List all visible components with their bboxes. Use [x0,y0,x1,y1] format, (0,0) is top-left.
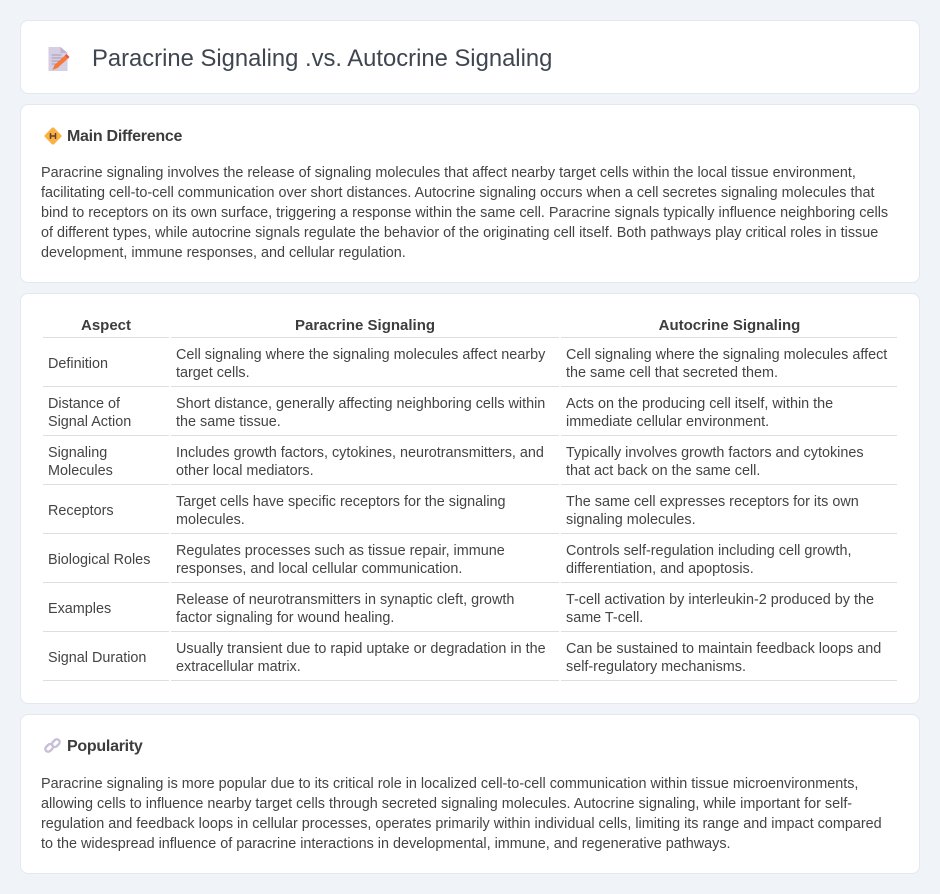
table row: examples: T-cell activation by interleukin-2 produced by the [566,592,874,608]
text block: main difference paragraph: facilitating cell-to-cell communication over short distances. Autocrine signaling occurs when a cell secretes signaling molecules that [41,185,874,201]
table row: distance of signal action: Acts on the producing cell itself, within the [566,396,833,412]
table row: definition: target cells. [176,365,250,381]
table row: receptors: Receptors [48,503,114,519]
table row: signaling molecules: other local mediators. [176,463,314,479]
table row: signaling molecules: Typically involves growth factors and cytokines [566,445,864,461]
table row: examples: Examples [48,601,111,617]
table row: biological roles: Regulates processes such as tissue repair, immune [176,543,505,559]
text block: popularity paragraph: Paracrine signaling is more popular due to its critical role in localized cell-to-cell communication within tissue microenvironments, [41,776,858,792]
table row: signaling molecules: Signaling [48,445,107,461]
text block: main difference paragraph: development, immune responses, and cellular regulation. [41,245,406,261]
icon: document with pencil [48,47,70,71]
table row: definition: Definition [48,356,108,372]
text block: popularity paragraph: regulation and feedback loops in cellular processes, operates primarily within individual cells, limiting its range and impact compared [41,816,882,832]
text block: main difference paragraph: bind to receptors on its own surface, triggering a response within the same cell. Paracrine signals typically influence neighboring cells [41,205,888,221]
table row: biological roles [48,543,852,577]
table row: signaling molecules: Molecules [48,463,113,479]
panel: main difference [20,104,920,283]
table row: signal duration: Usually transient due to rapid uptake or degradation in the [176,641,546,657]
table row: definition: Cell signaling where the signaling molecules affect nearby [176,347,545,363]
table row: distance of signal action: Distance of [48,396,120,412]
table row: signal duration: Signal Duration [48,650,146,666]
table row: distance of signal action: immediate cellular environment. [566,414,769,430]
table row: distance of signal action: Signal Action [48,414,131,430]
table header: Aspect [81,317,131,334]
table row: distance of signal action: the same tissue. [176,414,281,430]
heading: main difference: Main Difference [67,128,182,145]
table row: distance of signal action [48,396,833,430]
table row: signaling molecules: that act back on the same cell. [566,463,760,479]
table row: examples: same T-cell. [566,610,643,626]
table row: signaling molecules [48,445,864,479]
table row: receptors [48,494,859,528]
table row: biological roles: Controls self-regulation including cell growth, [566,543,852,559]
table row: definition [48,347,888,381]
text block: main difference paragraph [41,165,888,261]
table row: signal duration: self-regulatory mechanisms. [566,659,746,675]
table row: examples: Release of neurotransmitters in synaptic cleft, growth [176,592,514,608]
title: Paracrine Signaling .vs. Autocrine Signaling [92,45,552,72]
table row: receptors: signaling molecules. [566,512,696,528]
table row: examples [48,592,874,626]
table row: biological roles: Biological Roles [48,552,150,568]
panel: title header [20,20,920,94]
heading: popularity: Popularity [67,738,143,755]
table header [81,317,800,334]
table row: definition: the same cell that secreted them. [566,365,778,381]
table row: receptors: The same cell expresses receptors for its own [566,494,859,510]
table row: examples: factor signaling for wound healing. [176,610,394,626]
table row: signal duration: Can be sustained to maintain feedback loops and [566,641,881,657]
icon: diamond sign [44,127,62,145]
icon: chain link [44,738,61,753]
text block: main difference paragraph: Paracrine signaling involves the release of signaling molecules that affect nearby target cells within the local tissue environment, [41,165,856,181]
table header: Paracrine Signaling [295,317,435,334]
text block: main difference paragraph: of different types, while autocrine signals regulate the behavior of the originating cell itself. Both pathways play critical roles in tissue [41,225,878,241]
panel: comparison table [20,293,920,704]
table row: receptors: molecules. [176,512,245,528]
table row: signaling molecules: Includes growth factors, cytokines, neurotransmitters, and [176,445,544,461]
table row: biological roles: responses, and local cellular communication. [176,561,462,577]
table row: receptors: Target cells have specific receptors for the signaling [176,494,506,510]
table row: definition: Cell signaling where the signaling molecules affect [566,347,887,363]
panel: popularity [20,714,920,874]
table row: distance of signal action: Short distance, generally affecting neighboring cells within [176,396,545,412]
text block: popularity paragraph: to the widespread influence of paracrine interactions in developmental, immune, and regenerative pathways. [41,836,731,852]
table row: signal duration [48,641,881,675]
table row: signal duration: extracellular matrix. [176,659,301,675]
text block: popularity paragraph: allowing cells to influence nearby target cells through secreted signaling molecules. Autocrine signaling, while important for self- [41,796,852,812]
table row: biological roles: differentiation, and apoptosis. [566,561,754,577]
table header: Autocrine Signaling [659,317,800,334]
text block: popularity paragraph [41,776,882,852]
